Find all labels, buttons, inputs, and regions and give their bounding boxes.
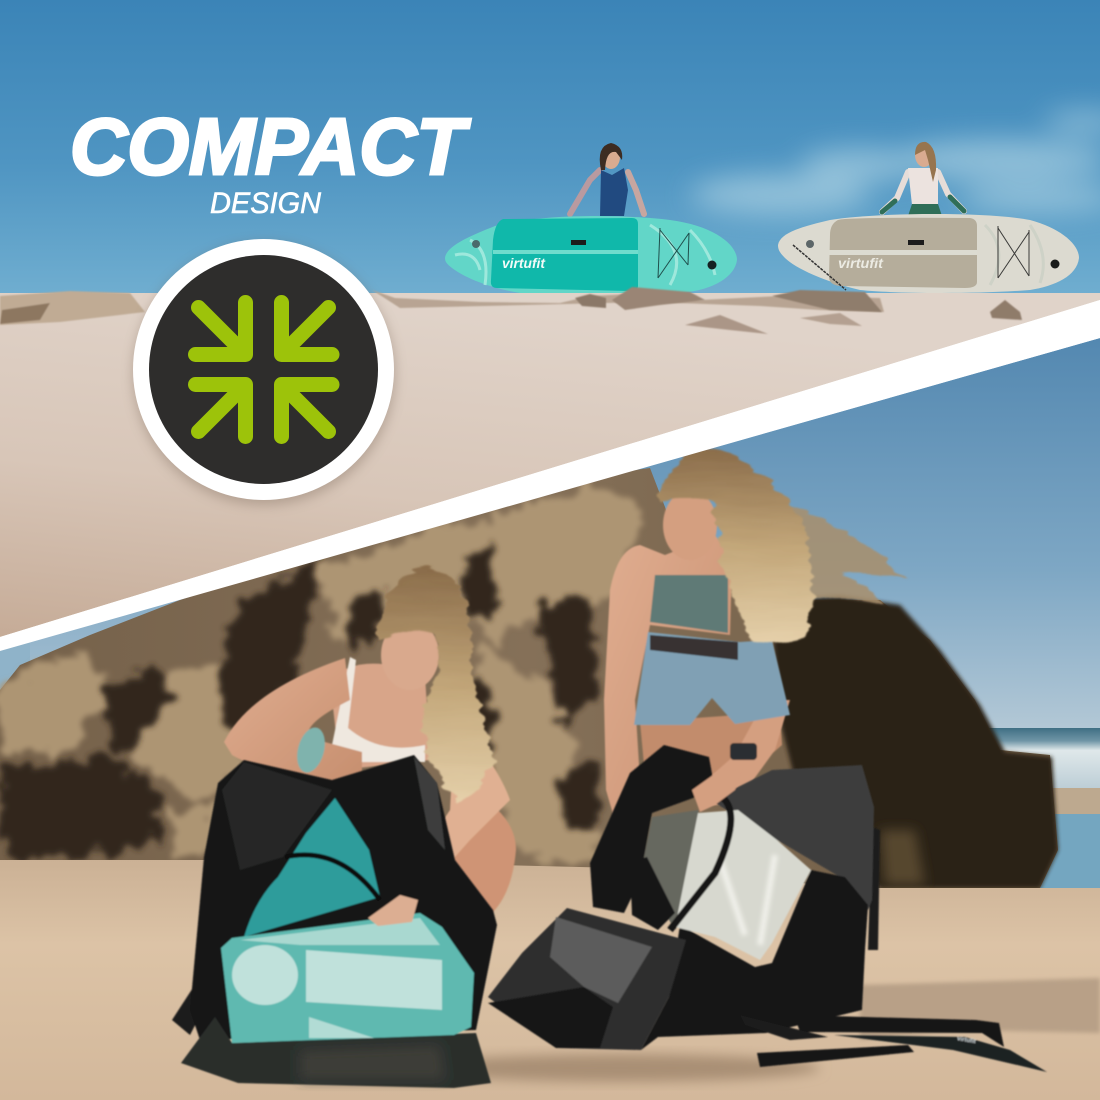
legs	[640, 715, 783, 775]
teal board body	[445, 216, 737, 293]
beige board body	[778, 214, 1079, 293]
smartwatch	[730, 743, 757, 760]
pump bottle	[630, 857, 675, 930]
hair	[378, 569, 495, 805]
title: COMPACT: COMPACT	[70, 102, 471, 191]
badge white ring	[133, 239, 394, 500]
blade wordmark: virtufit	[957, 1036, 976, 1045]
knit top	[650, 575, 728, 633]
subtitle: DESIGN: DESIGN	[210, 187, 321, 220]
badge dark disc	[149, 255, 378, 484]
pale board inside	[675, 810, 811, 960]
hand	[368, 895, 418, 926]
teal pad stripe	[493, 250, 638, 254]
arrow top-right	[282, 302, 332, 354]
lower photo: women packing boards on the beach	[0, 330, 1100, 1100]
handle	[908, 240, 924, 245]
bag back	[190, 755, 497, 1040]
bungee cords	[658, 228, 689, 278]
woman on the right	[604, 448, 905, 855]
bag bottom flap	[181, 1017, 491, 1088]
paddle blade	[834, 1035, 1047, 1072]
belt	[650, 635, 738, 660]
board pale triangle	[309, 1017, 374, 1038]
air hose	[670, 798, 731, 930]
flap dark area	[488, 987, 613, 1048]
roll pale top	[240, 918, 440, 945]
white diagonal band	[0, 300, 1100, 651]
beige deck pad	[829, 218, 977, 288]
bag side flap	[222, 762, 332, 870]
badge shadow	[133, 243, 395, 505]
beige pad stripe	[829, 250, 977, 255]
rear bungee cords	[998, 226, 1029, 278]
beach sand	[0, 860, 1100, 1100]
sunlit tan rock patches	[0, 490, 640, 860]
board pale panel	[306, 950, 442, 1010]
beige paddle board	[778, 142, 1079, 293]
sand shadow	[860, 978, 1100, 1040]
arrow bottom-right	[282, 384, 332, 436]
paddle handle	[740, 1015, 828, 1040]
valve	[1050, 260, 1060, 268]
teal paddle board	[445, 143, 737, 293]
paddle shaft	[794, 1015, 1004, 1047]
lower black body	[641, 870, 868, 1050]
flap light patch	[550, 917, 652, 1003]
woman in floral top	[882, 142, 964, 216]
right arm	[714, 699, 791, 806]
inner lining highlight	[414, 757, 445, 850]
woman in blue wetsuit	[570, 143, 644, 216]
rear strap	[171, 989, 196, 1036]
arrow bottom-left	[196, 384, 246, 436]
dark rock crevices	[0, 545, 600, 860]
air hose	[285, 855, 380, 900]
right bag with pale board	[488, 745, 1047, 1072]
smartwatch	[419, 840, 449, 872]
face	[380, 630, 440, 685]
icon badge: compress arrows	[133, 239, 395, 505]
board crease	[720, 855, 775, 945]
scrunchie	[296, 726, 326, 774]
beige marbling	[985, 225, 1043, 285]
flap of bag open	[488, 908, 686, 1050]
upper sand	[0, 293, 1100, 653]
shadow under bags	[420, 1054, 820, 1082]
sea and shore	[990, 728, 1100, 888]
clouds	[690, 112, 1100, 215]
dark right rock	[770, 596, 1058, 888]
handle	[571, 240, 586, 245]
denim shorts	[634, 632, 790, 725]
front bungee	[793, 245, 846, 290]
upper sky	[0, 0, 1100, 296]
black back of bag	[590, 745, 715, 913]
rolled teal board	[221, 913, 474, 1043]
left arm	[224, 658, 362, 785]
torso	[330, 664, 430, 770]
shoulder strap	[868, 827, 880, 950]
board pale circle	[232, 945, 298, 1005]
far left sky strip	[0, 646, 30, 690]
flap lighter panel	[300, 1045, 445, 1080]
lower sky	[0, 330, 1100, 730]
right arm	[444, 766, 510, 858]
inner grey lining	[641, 810, 715, 930]
white top	[332, 657, 425, 762]
hand	[692, 768, 745, 812]
rock formation	[0, 468, 1058, 890]
upper photo: women with boards on the dunes	[0, 0, 1100, 653]
face	[662, 497, 718, 552]
flowing wisps of hair	[790, 506, 908, 605]
dune rocks	[0, 290, 1022, 334]
paddle second shaft	[757, 1045, 914, 1067]
teal board marbling	[455, 225, 715, 285]
left bag with teal board	[172, 755, 497, 1088]
brand wordmark: virtufit	[838, 256, 884, 271]
teal deck pad	[491, 218, 638, 291]
rocks in front of boards	[575, 287, 882, 312]
grey canvas bag	[715, 765, 874, 910]
woman on the left	[224, 569, 516, 925]
arrow top-left	[196, 302, 246, 354]
lit rock edge near bag	[880, 830, 925, 885]
folded board teal	[244, 798, 380, 937]
torso and left arm	[603, 536, 732, 814]
valve	[708, 260, 716, 270]
main hair	[660, 448, 812, 645]
brand wordmark: virtufit	[502, 256, 546, 271]
legs	[454, 810, 517, 912]
